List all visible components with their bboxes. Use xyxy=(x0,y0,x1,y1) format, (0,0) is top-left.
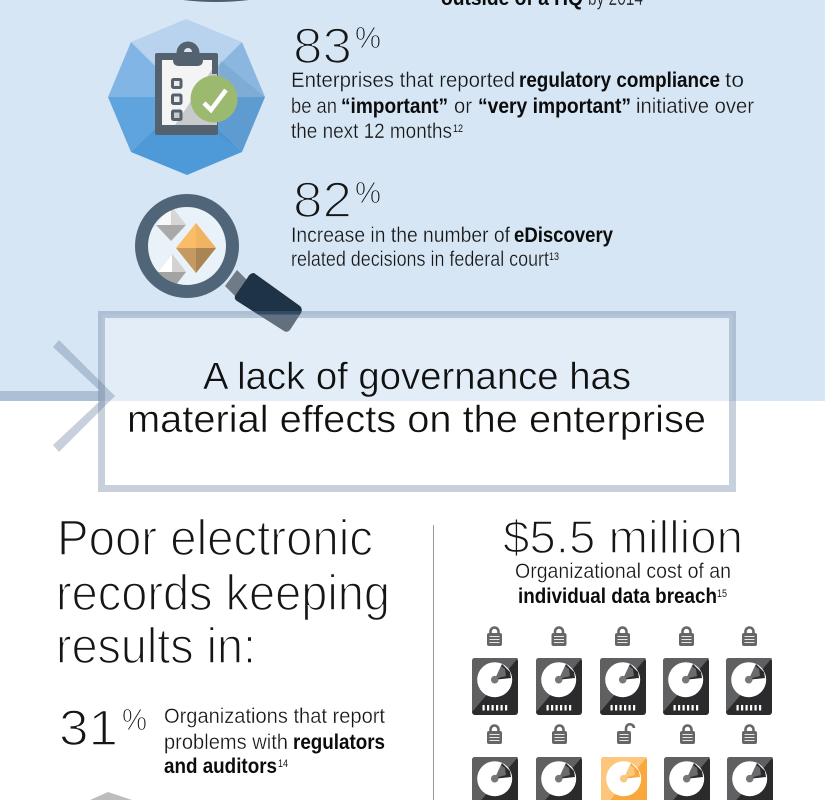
stat: 31 percent: 31 xyxy=(59,700,118,756)
stat: 31 percent: % xyxy=(122,702,147,737)
text: regulatory compliance description: 12 xyxy=(453,123,463,135)
text: regulatory compliance description: or xyxy=(454,95,472,118)
heading: poor electronic records keeping xyxy=(56,510,390,674)
icon: magnifying glass over diamonds xyxy=(142,200,302,332)
icon: unlocked orange drive xyxy=(601,724,647,800)
text: regulators and auditors description: regulators xyxy=(293,731,385,754)
text: regulatory compliance description: initiative over xyxy=(636,95,754,118)
top blue background panel xyxy=(0,0,825,401)
text: regulators and auditors description: problems with xyxy=(164,731,288,754)
stat: 5.5 million dollars: $5.5 million xyxy=(503,511,743,563)
heading: governance line one: A lack of governance has xyxy=(203,356,631,398)
text: regulators and auditors description: 14 xyxy=(278,758,288,770)
text: data breach cost description: individual data breach xyxy=(518,585,717,608)
stat: 82 percent: % xyxy=(355,175,381,210)
text: eDiscovery description xyxy=(291,224,613,271)
stat: 82 percent xyxy=(293,172,381,228)
text: regulatory compliance description: “important” xyxy=(341,95,448,118)
stat: 31 percent xyxy=(59,700,147,756)
text: regulatory compliance description: be an xyxy=(291,95,337,118)
text: data breach cost description xyxy=(515,560,731,608)
stat: 82 percent: 82 xyxy=(293,172,352,228)
stat: 83 percent: 83 xyxy=(293,18,352,74)
text: eDiscovery description: Increase in the number of xyxy=(291,224,510,247)
text: regulatory compliance description: Enterprises that reported xyxy=(291,69,515,92)
heading: governance line two: material effects on the enterprise xyxy=(127,399,706,441)
text: regulators and auditors description: and auditors xyxy=(164,755,277,778)
text: regulatory compliance description xyxy=(291,69,754,143)
text: regulatory compliance description: “very important” xyxy=(478,95,631,118)
icon grid: locked drives xyxy=(472,628,773,800)
stat: 83 percent xyxy=(293,18,381,74)
text: data breach cost description: 15 xyxy=(717,588,727,600)
heading: poor electronic records keeping: records keeping xyxy=(56,565,390,621)
text: eDiscovery description: related decisions in federal court xyxy=(291,248,549,271)
text: regulatory compliance description: to xyxy=(725,69,744,92)
heading: poor electronic records keeping: results in: xyxy=(56,618,256,674)
text: regulators and auditors description xyxy=(164,705,385,778)
callout box: governance heading xyxy=(102,314,732,488)
text: regulatory compliance description: the next 12 months xyxy=(291,120,452,143)
text: regulators and auditors description: Organizations that report xyxy=(164,705,385,728)
icon: clipboard in blue octagon xyxy=(108,19,265,175)
text: regulatory compliance description: regulatory compliance xyxy=(519,69,720,92)
text: data breach cost description: Organizational cost of an xyxy=(515,560,731,583)
text: eDiscovery description: 13 xyxy=(549,251,559,263)
icon: cropped grey shape at bottom edge xyxy=(90,792,132,800)
heading: poor electronic records keeping: Poor electronic xyxy=(57,510,373,566)
icon: cropped dark shape at top edge xyxy=(183,0,249,2)
text: eDiscovery description: eDiscovery xyxy=(514,224,613,247)
arrow: pointing into callout box xyxy=(0,340,115,452)
stat: 83 percent: % xyxy=(355,20,381,55)
